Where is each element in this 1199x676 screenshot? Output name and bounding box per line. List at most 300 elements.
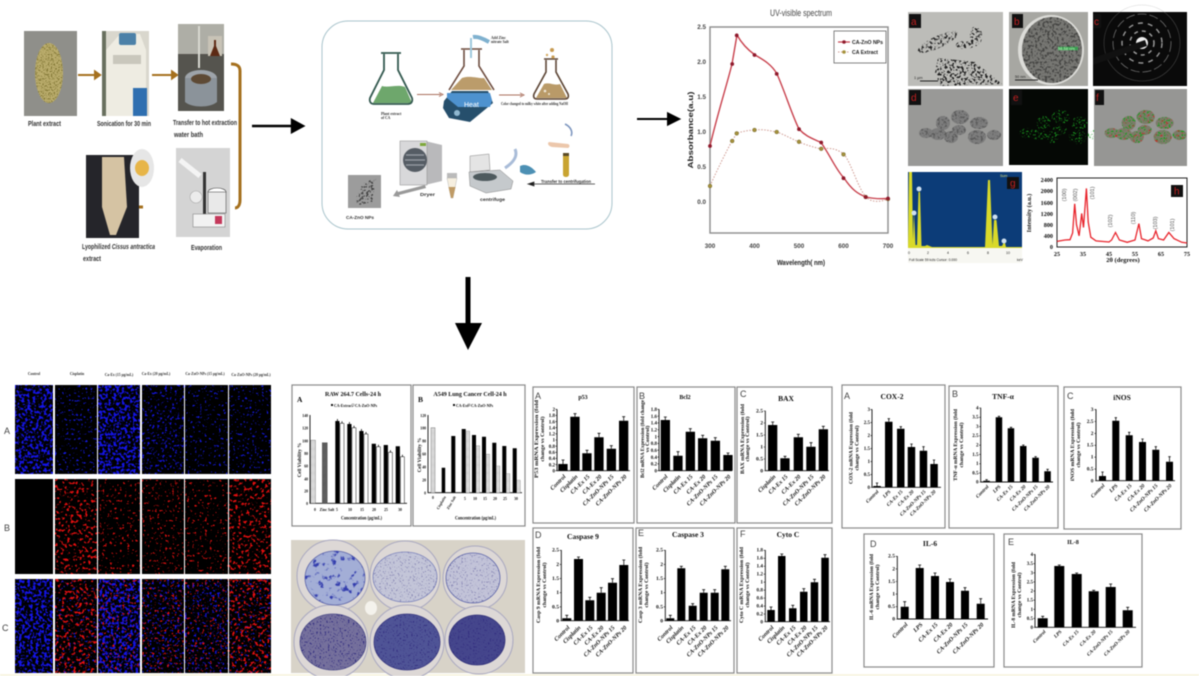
y ticks: 0 [1030, 626, 1034, 631]
y ticks: 2 [1030, 590, 1034, 594]
image: CA-ZnO NPs micrograph [348, 175, 381, 208]
chart title: RAW 264.7 Cells-24 h [325, 392, 382, 398]
axes [556, 409, 630, 471]
y ticks: 2.5 [972, 434, 979, 439]
y ticks: 1.8 [757, 548, 763, 554]
y ticks: 2 [660, 562, 663, 568]
y ticks: 0 [552, 469, 556, 474]
x tick labels: 400 [749, 243, 760, 250]
x tick labels: 25 [503, 497, 507, 501]
EDX axis text: keV [1017, 258, 1024, 262]
title: COX-2 [881, 392, 904, 401]
XRD x ticks: 55 [1132, 251, 1138, 258]
y ticks: 0.4 [757, 604, 763, 610]
label: CA-ZnO NPs: CA-ZnO NPs [346, 215, 375, 220]
y ticks: 0 [654, 469, 658, 474]
bars [767, 556, 829, 622]
y ticks: 2 [1091, 431, 1094, 437]
label: colour change: Color changed to milky white after adding NaOH [501, 102, 568, 106]
y ticks: 0.5 [552, 604, 559, 610]
XRD peak labels: (103) [1153, 216, 1159, 229]
y axis title [847, 411, 860, 484]
icon: heated flask [449, 37, 494, 90]
bars [873, 422, 938, 487]
photo: sonicator [102, 31, 149, 116]
y ticks: 3.5 [972, 416, 979, 421]
x tick labels: Cisplatin [436, 495, 447, 510]
y axis title [639, 400, 651, 478]
chart: UV-visible spectrum [686, 8, 894, 267]
bars [1099, 421, 1173, 481]
chart: p53 [533, 387, 634, 523]
x labels [757, 474, 827, 508]
x labels [866, 489, 938, 518]
x labels: CA-Ex 15 [676, 625, 697, 647]
x tick labels: 20 [493, 497, 497, 501]
y axis title: change vs Control) [643, 562, 650, 607]
label: add zinc nitrate salt: nitrate Salt [491, 40, 509, 44]
row labels: A [4, 426, 10, 436]
x labels: CA-ZnO-NPs 20 [595, 625, 628, 659]
y ticks: 120 [420, 414, 426, 418]
x labels: Control [892, 622, 910, 640]
x labels: Control [652, 474, 670, 492]
error bars [1041, 565, 1129, 618]
letter h: h [1174, 186, 1180, 198]
column labels: Ca-ZnO-NPs (20 µg/mL) [231, 373, 271, 377]
y axis title: change vs Control) [539, 416, 546, 461]
x labels: LPS [992, 485, 1003, 495]
y axis title [738, 546, 751, 623]
chart: IL-8 [1004, 534, 1142, 667]
XRD peak labels: (110) [1131, 212, 1137, 224]
y ticks: 60 [422, 453, 426, 457]
error bars [669, 566, 727, 618]
axes [871, 409, 941, 488]
bars [983, 417, 1051, 482]
top wells [305, 551, 500, 605]
axes [428, 415, 522, 493]
x ticks: 5 [336, 508, 338, 512]
y ticks: 1.2 [757, 572, 763, 578]
y ticks: 20 [422, 479, 426, 483]
row A: blue nuclei [15, 385, 271, 474]
y ticks: 2 [892, 566, 895, 572]
x tick labels: 600 [838, 243, 849, 250]
label: plant extract of CA: of CA [381, 116, 391, 120]
panel: TEM micrograph a: a [911, 17, 917, 28]
y ticks: 0.4 [651, 456, 658, 461]
x labels: CA-ZnO-NPs 20 [1024, 485, 1052, 513]
y ticks: 0.5 [1027, 617, 1034, 622]
error bars [771, 422, 825, 458]
y ticks: 1.4 [651, 422, 658, 427]
y title: Cell Viability % [298, 443, 303, 477]
y ticks: 1.5 [1087, 443, 1094, 449]
y axis title [533, 399, 546, 478]
x ticks: 25 [384, 508, 388, 512]
x labels: CA-ZnO-NPs 15 [1087, 630, 1115, 658]
error bars [565, 557, 625, 618]
y ticks: 1 [976, 462, 979, 467]
x labels [892, 622, 985, 656]
y ticks: 0 [868, 486, 870, 491]
y ticks: 4 [1030, 553, 1034, 558]
y ticks: 140 [302, 414, 308, 418]
letter: F [740, 529, 746, 539]
y ticks: 1 [1030, 608, 1034, 613]
y tick labels: 0.5 [697, 164, 706, 171]
title: IL-6 [923, 539, 937, 548]
chart: iNOS [1064, 387, 1181, 529]
panel outline [322, 21, 612, 229]
x tick labels: Zinc Salt [446, 495, 457, 510]
XRD x title: 2θ (degrees) [1106, 257, 1140, 264]
y ticks: 3 [868, 408, 870, 413]
icon: large curved arrow [505, 149, 516, 168]
bottom page strip [0, 674, 1199, 676]
XRD peak labels: (101) [1090, 186, 1096, 199]
x labels: Cisplatin [562, 625, 583, 645]
x labels: CA-Ex 20 [1009, 485, 1028, 503]
legend: CA-ZnO NPs [852, 40, 883, 46]
icon: curved blue arrow small [565, 124, 572, 136]
row C: merged channels [15, 579, 271, 673]
chart: RAW 264.7 viability [292, 385, 411, 526]
panel: plant extraction steps [24, 24, 240, 263]
letter g: g [1010, 178, 1016, 190]
y ticks: 1.5 [888, 579, 895, 585]
x tick labels: 30 [514, 497, 518, 501]
panel: fluorescence microscopy grid [2, 372, 271, 673]
legend: CA-Ext [456, 404, 469, 408]
y ticks: 1 [552, 439, 556, 444]
x labels: CA-ZnO-NPs 15 [782, 474, 815, 508]
x labels: LPS [882, 490, 893, 500]
y ticks: 0.4 [549, 457, 556, 462]
EDX axis text: 10 [1006, 251, 1010, 255]
x labels: CA-Ex 15 [1062, 630, 1081, 648]
EDX axis text: 4 [947, 251, 949, 255]
x labels: CA-Ex 15 [768, 474, 789, 496]
x labels: Cisplatin [757, 474, 778, 494]
arrow: bracket to evaporation [231, 64, 240, 208]
x labels: CA-Ex 20 [582, 474, 603, 496]
y axis title: change vs Control) [874, 564, 881, 609]
panel: elemental map e: e [1013, 93, 1019, 104]
x labels: Control [758, 625, 776, 643]
panel: overlay map f: f [1096, 93, 1099, 104]
title: BAX [778, 394, 794, 403]
y axis title: IL-8 mRNA Expression (fold [1010, 561, 1017, 628]
panel: HAADF image d [908, 89, 1003, 166]
y ticks: 1.4 [757, 564, 763, 570]
y ticks: 80 [304, 452, 308, 456]
panel: overlay map f [1094, 89, 1187, 166]
XRD y ticks: 400 [1044, 233, 1053, 240]
error bars [664, 417, 730, 456]
EDX peaks [908, 172, 1022, 248]
y ticks: 2.5 [552, 548, 559, 554]
centre marker [365, 601, 377, 615]
EDX axis text: Sum [1000, 174, 1007, 178]
XRD curve [1057, 188, 1187, 243]
label: transfer to hot extraction: Transfer to hot extraction [173, 118, 237, 127]
y axis title: Bcl2 mRNA Expression (fold change [639, 400, 646, 478]
letter: A [844, 391, 850, 401]
legend [834, 31, 886, 63]
y tick labels: 2.5 [697, 24, 706, 31]
axes [764, 411, 829, 471]
y ticks: 0.8 [757, 588, 763, 594]
y ticks: 1 [660, 590, 663, 596]
title: Caspase 9 [567, 532, 599, 541]
y ticks: 1.8 [651, 408, 658, 413]
y ticks: 40 [304, 477, 308, 481]
error bars [1101, 418, 1171, 476]
y ticks: 2 [976, 444, 979, 448]
label: extract: extract [83, 254, 101, 263]
x labels: LPS [1053, 630, 1064, 640]
y tick labels: 1.5 [697, 94, 706, 101]
x labels: CA-Ex 20 [897, 490, 916, 508]
arrow: down to biological assays [455, 277, 482, 350]
letter: C [1067, 391, 1074, 401]
bars [311, 419, 404, 503]
x labels: CA-Ex 20 [781, 474, 802, 496]
label: water bath: water bath [173, 130, 203, 139]
XRD x ticks: 25 [1054, 251, 1060, 258]
y ticks: 0.2 [549, 463, 556, 468]
label: plant extract of CA: Plant extract [381, 112, 401, 116]
series: CA extract [708, 128, 890, 201]
y ticks: 0 [660, 618, 663, 624]
axes [980, 408, 1053, 482]
x tick labels [432, 495, 518, 510]
label: dryer: Dryer [420, 192, 435, 197]
letter: E [1008, 537, 1014, 547]
label: heat: Heat [464, 102, 479, 109]
column labels: Ca-Ex (20 µg/mL) [142, 372, 171, 376]
x labels: CA-ZnO-NPs 15 [686, 474, 719, 508]
panel: TEM micrograph b [1009, 12, 1088, 86]
y axis title: change vs Control) [744, 416, 751, 461]
error bars [985, 416, 1049, 481]
y ticks: 0 [424, 492, 426, 496]
y ticks: 0.6 [757, 596, 763, 602]
arrow: to milky flask [499, 93, 524, 97]
chart: BAX [737, 387, 832, 523]
x ticks: 20 [372, 508, 376, 512]
x labels: Control [866, 489, 881, 505]
panel: TEM micrograph a [908, 12, 1003, 86]
panel: TEM micrograph a: 1 µm [914, 76, 923, 80]
x labels [657, 625, 730, 659]
row labels: C [2, 623, 9, 633]
chart: EDX spectrum g [908, 172, 1024, 263]
panel: TEM micrograph b: 58.58 nm [1058, 46, 1075, 51]
y ticks: 0.5 [888, 604, 895, 610]
label: lyophilized: Lyophilized Cissus antractica [82, 242, 155, 251]
panel: green synthesis scheme [322, 21, 612, 229]
y ticks: 0.6 [549, 451, 556, 456]
y ticks: 1 [868, 460, 870, 465]
x labels: CA-ZnO-NPs 15 [1129, 483, 1160, 514]
arrow: to lyophilized extract [139, 206, 143, 208]
y ticks: 1 [760, 444, 763, 450]
XRD y title: Intensity (a.u.) [1026, 194, 1033, 232]
y ticks: 3 [1030, 571, 1034, 576]
x labels: CA-ZnO-NPs 20 [910, 490, 938, 518]
y ticks: 2 [552, 408, 556, 413]
y ticks: 80 [422, 440, 426, 444]
y tick labels: 1.0 [697, 129, 706, 136]
y ticks: 0.8 [549, 445, 556, 450]
XRD y ticks: 2400 [1041, 177, 1053, 184]
XRD peak labels: (100) [1062, 188, 1068, 201]
y ticks: 2.5 [756, 408, 763, 414]
label: plant extract: Plant extract [28, 119, 61, 128]
y axis title [952, 408, 965, 481]
chart title: UV-visible spectrum [770, 8, 832, 19]
x labels [652, 474, 732, 508]
y ticks: 0 [976, 481, 979, 486]
y ticks: 0.5 [656, 604, 663, 610]
x labels [1090, 483, 1174, 514]
x labels: Cisplatin [559, 474, 580, 494]
x ticks: 15 [360, 508, 364, 512]
y ticks: 40 [422, 466, 426, 470]
x labels: CA-Ex 15 [918, 622, 939, 644]
y ticks: 1.6 [757, 556, 763, 562]
XRD peak labels: (101) [1170, 218, 1176, 231]
y ticks: 2 [760, 420, 763, 426]
y ticks: 0 [1091, 478, 1094, 484]
icon: centrifuge [469, 154, 513, 193]
x labels: CA-ZnO-NPs 20 [1104, 630, 1132, 658]
EDX axis text [908, 174, 1024, 263]
panel: SAED pattern c: c [1094, 17, 1099, 28]
column labels: Ca-ZnO-NPs (15 µg/mL) [185, 372, 225, 376]
letter h [1171, 185, 1183, 198]
y ticks: 1.6 [549, 420, 556, 425]
x labels: CA-ZnO-NPs 15 [686, 625, 719, 659]
y ticks: 2.5 [1087, 419, 1094, 425]
y axis title [739, 403, 751, 474]
y axis title: change vs Control) [958, 422, 965, 467]
x labels: CA-ZnO-NPs 15 [582, 474, 615, 508]
chart title: A549 Lung Cancer Cell-24 h [433, 392, 507, 398]
chart: Cyto C [737, 528, 832, 673]
chart: IL-6 [864, 534, 994, 667]
XRD peak labels: (102) [1108, 214, 1114, 227]
x labels: CA-ZnO-NPs 20 [952, 622, 985, 656]
x labels: Cisplatin [662, 474, 683, 494]
icon: hot plate [443, 91, 493, 122]
letter: C [740, 389, 747, 399]
y ticks: 60 [304, 465, 308, 469]
legend: CA-ZnO-NPs [355, 404, 378, 408]
y ticks: 0.2 [757, 611, 763, 617]
icon: conical tube [447, 173, 457, 198]
chart: TNF-alpha [949, 386, 1058, 528]
x labels: CA-Ex 20 [687, 625, 708, 647]
arrow: sonication to hot extraction [152, 72, 177, 78]
EDX element markers [912, 186, 1006, 244]
y ticks: 100 [302, 439, 308, 443]
XRD x ticks: 45 [1106, 251, 1112, 258]
y ticks: 0.2 [651, 463, 658, 468]
y ticks: 0 [892, 617, 895, 623]
title: TNF-α [992, 392, 1015, 401]
x tick labels: 500 [794, 243, 805, 250]
y axis title [1010, 561, 1023, 628]
axes [764, 550, 830, 622]
y axis title: Casp 9 mRNA Expression (fold [535, 546, 542, 623]
y ticks: 4 [976, 406, 979, 411]
y ticks: 0 [760, 468, 763, 474]
bars [562, 559, 628, 621]
x tick labels: 300 [705, 243, 716, 250]
y ticks: 3 [976, 425, 979, 430]
letter A: A [297, 395, 303, 404]
y ticks: 2.5 [656, 548, 663, 554]
letter: A [535, 391, 541, 401]
y axis title: change vs Control) [744, 562, 751, 607]
icon: freeze dryer [400, 141, 442, 185]
x tick labels: 5 [464, 497, 466, 501]
arrow: to heat [417, 92, 443, 96]
x labels: CA-Ex 15 [570, 474, 591, 496]
label: add zinc nitrate salt: Add Zinc [491, 36, 506, 40]
chart: A549 viability [413, 385, 525, 526]
EDX axis text: 2 [927, 251, 929, 255]
y tick labels: 2.0 [697, 59, 706, 66]
photo: lyophilized extract tube [86, 149, 154, 238]
x labels: CA-ZnO-NPs 20 [1143, 483, 1174, 514]
title: IL-8 [1067, 539, 1079, 546]
y axis title: Cyto C mRNA Expression (fold [738, 546, 745, 623]
x labels: CA-ZnO-NPs 15 [786, 625, 819, 659]
bars [901, 568, 985, 619]
chart: COX-2 [842, 385, 945, 528]
y ticks: 3.5 [1027, 562, 1034, 567]
x ticks: Zinc Salt [320, 508, 335, 512]
y ticks: 0 [760, 619, 763, 625]
x tick labels: 15 [483, 497, 487, 501]
y ticks: 1 [556, 590, 559, 596]
XRD x ticks: 65 [1158, 251, 1164, 258]
photo: plant extract [24, 31, 77, 116]
x labels: CA-ZnO-NPs 20 [699, 474, 732, 508]
y axis title: change vs Control) [541, 562, 548, 607]
letter: D [535, 530, 542, 540]
y axis title: change vs Control) [853, 425, 860, 470]
icon: milky flask with bubbles [534, 48, 568, 99]
x labels [758, 625, 829, 659]
x labels: Cisplatin [665, 625, 686, 645]
XRD y ticks: 800 [1044, 222, 1053, 229]
EDX axis text: 0 [908, 251, 910, 255]
axes [310, 415, 407, 503]
x labels: Control [976, 484, 991, 500]
x tick labels: 700 [883, 243, 894, 250]
letter: E [638, 528, 644, 538]
y ticks: 2.5 [864, 421, 870, 426]
x labels [976, 484, 1052, 513]
icon: yellow test tube [563, 153, 569, 177]
legend: CA-ZnO-NPs [471, 404, 494, 408]
